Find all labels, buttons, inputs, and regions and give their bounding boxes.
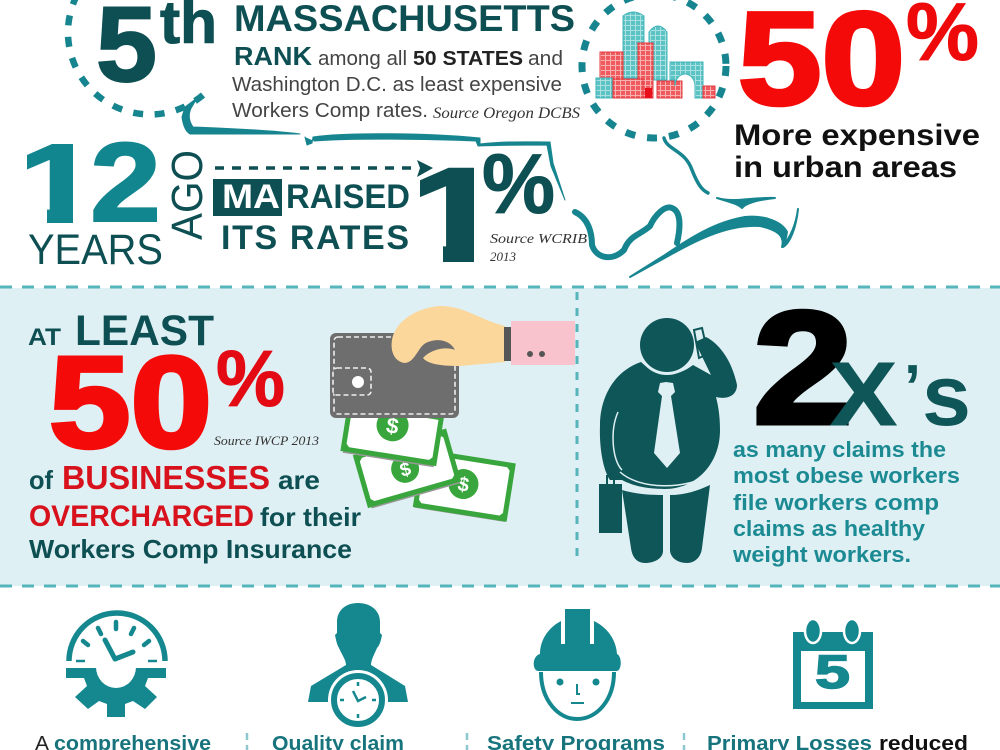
text block: obese workers claims: file workers comp <box>733 490 939 515</box>
text block: businesses overcharged: for their <box>260 502 361 532</box>
icon: wallet, hand and money <box>330 306 575 522</box>
text block: obese workers claims <box>732 437 960 567</box>
text block: Massachusetts rank: among all <box>318 48 407 70</box>
text block: MA raised its rates <box>213 178 410 257</box>
stat: 1 percent: Source WCRIB <box>490 232 588 247</box>
badge: city skyline <box>582 0 726 138</box>
icon: clock gear <box>66 613 166 717</box>
icon: person with clock <box>308 603 408 730</box>
stat: 2 x's: s <box>922 348 971 444</box>
text block: Massachusetts rank: Washington D.C. as least expensive <box>232 73 562 96</box>
labels: bottom captions <box>35 733 968 750</box>
icon: obese worker on phone <box>599 315 737 563</box>
stat: 50 percent more expensive: More expensive <box>734 119 980 152</box>
text block: obese workers claims: most obese workers <box>733 463 960 488</box>
text block: Massachusetts rank <box>232 0 580 122</box>
stat: at least 50 percent overcharged: AT <box>28 324 61 351</box>
panel: obesity and overcharge background <box>0 287 1000 586</box>
stat: 1 percent: 2013 <box>490 249 516 264</box>
bill: right: $ <box>456 473 471 497</box>
hand <box>392 306 505 366</box>
text block: obese workers claims: claims as healthy <box>733 516 925 541</box>
bill: middle: $ <box>398 459 414 482</box>
wallet <box>330 333 459 418</box>
text block: businesses overcharged: Workers Comp Insurance <box>29 534 352 564</box>
text block: MA raised its rates: ITS RATES <box>221 219 409 257</box>
text block: Massachusetts rank: and <box>528 48 563 70</box>
badge: 5th rank <box>68 0 217 114</box>
text block: businesses overcharged <box>29 459 361 564</box>
stat: at least 50 percent overcharged <box>28 307 320 475</box>
bill: top <box>341 402 443 468</box>
stat: 12 years ago: AGO <box>163 150 212 240</box>
bill: right <box>413 449 515 522</box>
text block: businesses overcharged: are <box>278 465 320 495</box>
stat: 2 x's: ’ <box>904 353 921 422</box>
stat: at least 50 percent overcharged: 50 <box>49 329 212 475</box>
text block: obese workers claims: weight workers. <box>732 542 911 567</box>
text block: businesses overcharged: of <box>29 465 53 495</box>
stat: 12 years ago: YEARS <box>28 226 163 274</box>
stat: at least 50 percent overcharged: Source IWCP 2013 <box>214 433 320 448</box>
stat: 12 years ago <box>27 142 202 264</box>
stat: 1 percent <box>420 154 587 262</box>
text block: Massachusetts rank: Source Oregon DCBS <box>433 105 580 122</box>
stat: 50 percent more expensive <box>734 0 980 184</box>
stat: 12 years ago: 1 <box>13 121 104 246</box>
bill: top: $ <box>384 412 400 439</box>
text block: MA raised its rates: MA <box>222 178 280 216</box>
stat: at least 50 percent overcharged: % <box>216 334 285 423</box>
map outline of Massachusetts <box>182 98 798 277</box>
arrow: dashed to 1 percent <box>215 160 433 177</box>
sleeve cuff <box>504 321 575 365</box>
stat: 2 x's: 2 <box>753 278 853 457</box>
text block: businesses overcharged: BUSINESSES <box>62 459 270 496</box>
stat: at least 50 percent overcharged: LEAST <box>75 307 214 355</box>
text block: businesses overcharged: OVERCHARGED <box>29 500 254 533</box>
text block: Massachusetts rank: RANK <box>234 41 312 71</box>
text block: Massachusetts rank: Workers Comp rates. <box>232 99 428 122</box>
stat: 1 percent: % <box>482 137 555 231</box>
stat: 12 years ago: 2 <box>90 120 161 245</box>
text block: obese workers claims: as many claims the <box>733 437 946 462</box>
stat: 50 percent more expensive: in urban areas <box>734 151 957 184</box>
stat: 1 percent: 1 <box>401 141 512 290</box>
stat: 2 x's <box>753 278 971 457</box>
bill: middle <box>353 429 461 509</box>
icon: hard hat worker <box>534 609 621 719</box>
icon: calendar five: 5 <box>815 645 850 698</box>
text block: MA raised its rates: RAISED <box>286 178 410 216</box>
text block: Massachusetts rank: 50 STATES <box>413 48 523 70</box>
icon: calendar five <box>793 619 873 709</box>
stat: 2 x's: X <box>830 345 897 445</box>
